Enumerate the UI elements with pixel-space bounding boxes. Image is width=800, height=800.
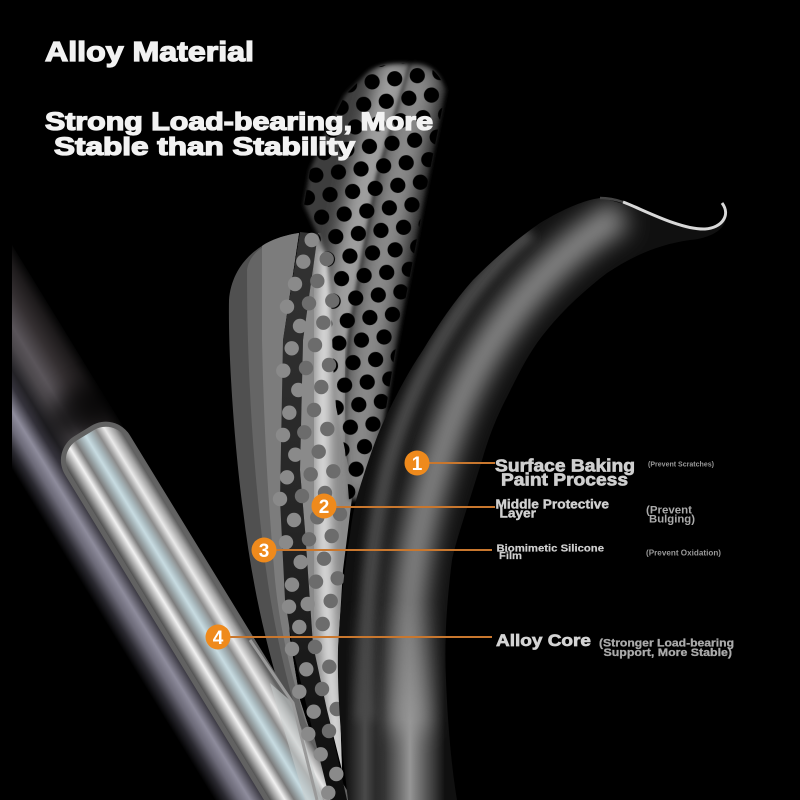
callout 1: surface baking paint process: Paint Process xyxy=(501,470,628,490)
callout 3: biomimetic silicone film: Film xyxy=(499,550,522,562)
callout 1: surface baking paint process: 1 xyxy=(412,454,423,475)
film overlay across the core xyxy=(250,640,323,800)
callout 3: biomimetic silicone film: 3 xyxy=(259,541,269,562)
title: Alloy Material xyxy=(45,36,254,67)
callout 2: middle protective layer: 2 xyxy=(319,497,329,518)
callout 2: middle protective layer: Middle Protective xyxy=(496,496,609,512)
callout 4: alloy core: 4 xyxy=(213,628,224,649)
tube lip highlight xyxy=(600,198,623,202)
callout 1: surface baking paint process xyxy=(404,450,714,490)
light holes over dark strip xyxy=(273,233,343,800)
callout 2: middle protective layer xyxy=(312,494,695,526)
middle protective layer: perforated sheet xyxy=(273,60,450,800)
callout 4: alloy core xyxy=(206,624,734,659)
subtitle xyxy=(45,108,433,161)
callout 1: surface baking paint process: Surface Baking xyxy=(495,456,635,476)
upper right fold xyxy=(340,60,450,500)
black perforation holes xyxy=(300,60,450,505)
callout 1: surface baking paint process: (Prevent Scratches) xyxy=(648,462,714,468)
outer black painted tube xyxy=(335,195,735,800)
callout 2: middle protective layer: (Prevent xyxy=(646,504,692,516)
subtitle: Strong Load-bearing, More xyxy=(45,108,433,136)
alloy core capsule xyxy=(39,371,353,800)
film layer: biomimetic silicone film xyxy=(229,233,332,800)
callout 3: biomimetic silicone film: (Prevent Oxidation) xyxy=(646,548,721,558)
upper left fold xyxy=(300,60,410,460)
callout 4: alloy core: (Stronger Load-bearing xyxy=(599,638,734,650)
callout 4: alloy core: Alloy Core xyxy=(496,631,591,650)
callout 3: biomimetic silicone film: Biomimetic Silicone xyxy=(496,542,604,554)
dark perforated strip xyxy=(280,232,347,800)
subtitle: Stable than Stability xyxy=(54,133,355,161)
grey holes over silver strip xyxy=(295,252,347,738)
silver perforated strip xyxy=(300,233,352,770)
callout 3: biomimetic silicone film xyxy=(252,538,721,562)
outer tube cross-section xyxy=(12,245,352,800)
callout 2: middle protective layer: Bulging) xyxy=(649,514,695,526)
callout 4: alloy core: Support, More Stable) xyxy=(604,647,732,659)
callout 2: middle protective layer: Layer xyxy=(500,506,536,520)
